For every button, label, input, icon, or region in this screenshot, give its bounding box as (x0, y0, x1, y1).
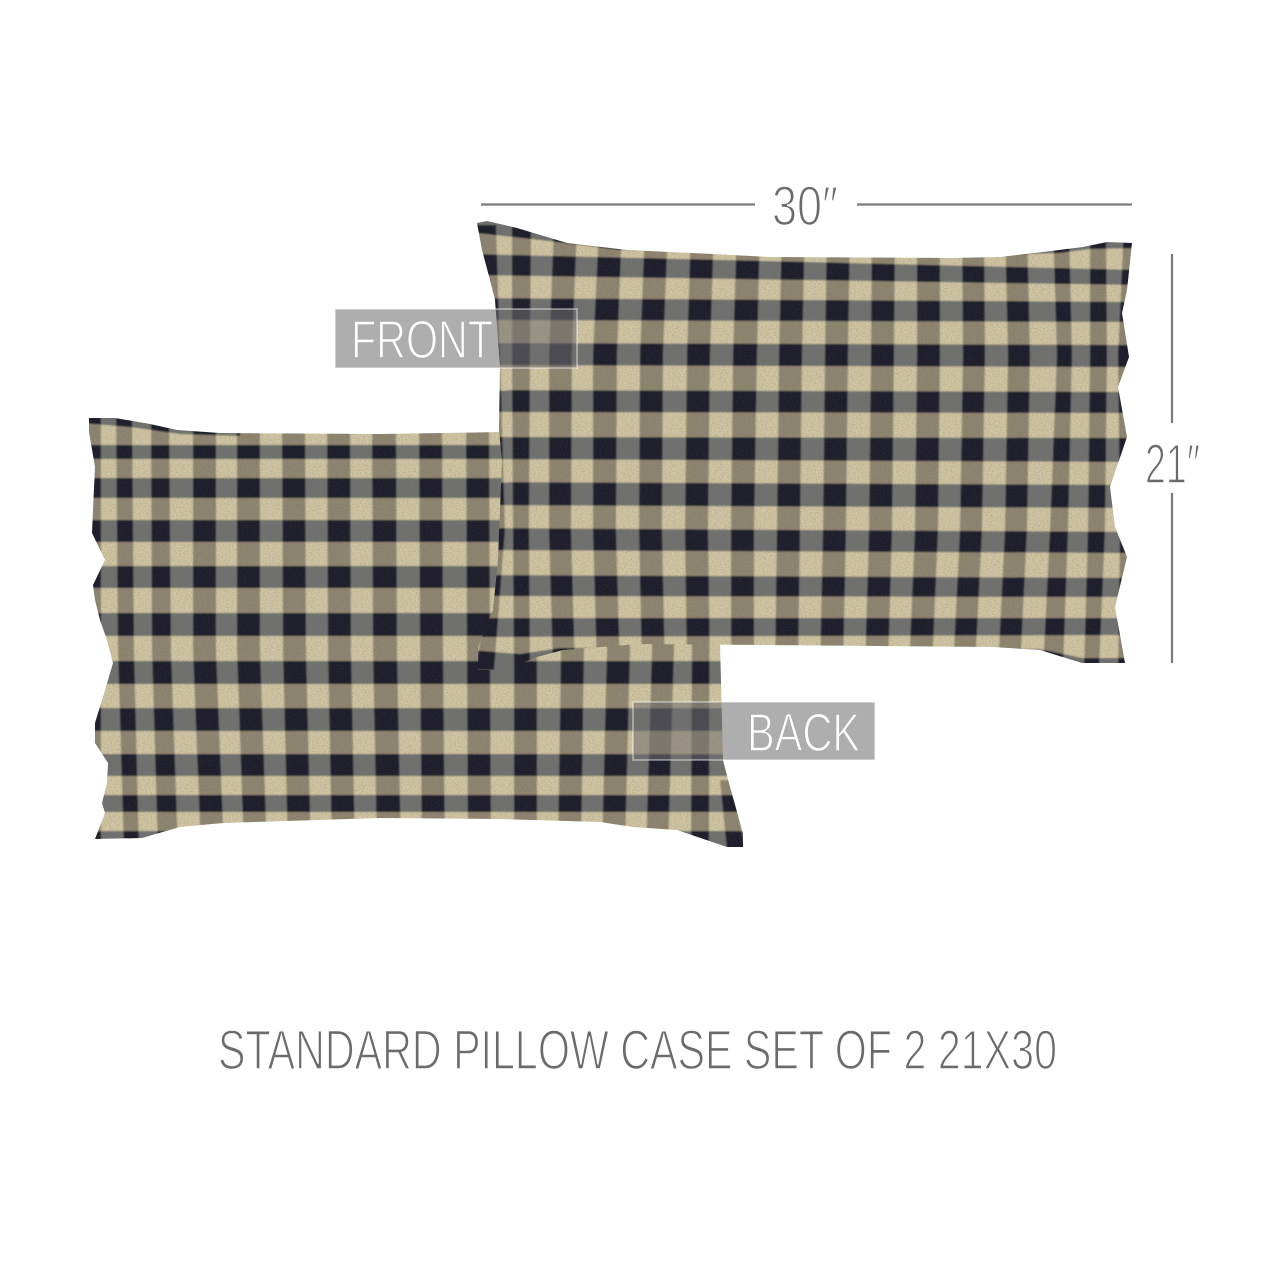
front pillow case (470, 205, 1145, 680)
label: front: FRONT (351, 310, 493, 370)
height dimension: 21 inches: 21″ (1145, 432, 1200, 495)
width dimension: 30 inches: 30″ (772, 174, 838, 237)
label: back (633, 702, 875, 763)
label: back: BACK (747, 703, 860, 763)
back pillow case (80, 405, 760, 855)
